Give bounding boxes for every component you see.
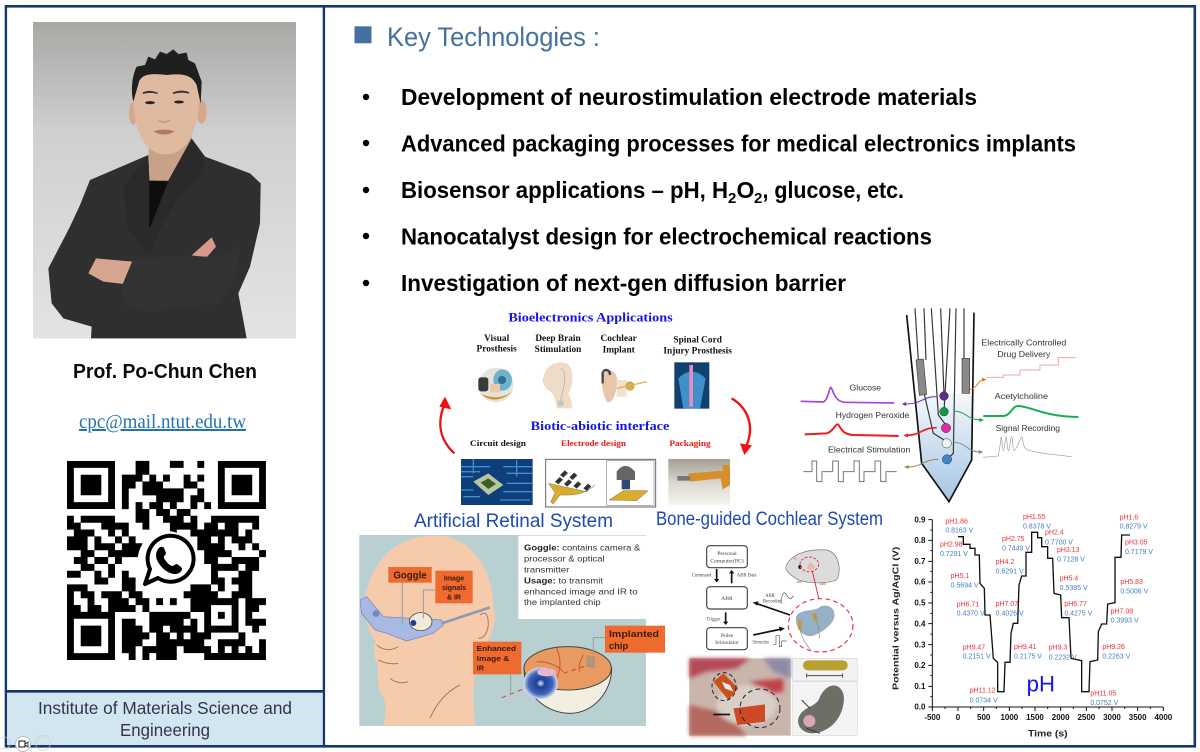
application labels: Stimulation bbox=[535, 345, 582, 355]
chart: potential versus time: Time (s) bbox=[1028, 729, 1068, 739]
pH labels: 0.5385 V bbox=[1060, 585, 1088, 592]
pH labels: 0.0752 V bbox=[1090, 700, 1119, 707]
y tick labels: 0.6 bbox=[914, 578, 926, 587]
pH labels: pH4.2 bbox=[996, 559, 1014, 566]
left forearm bbox=[88, 258, 133, 284]
electrode drawing bbox=[793, 658, 857, 681]
portrait photo bbox=[33, 22, 296, 338]
pH labels: pH11.12 bbox=[970, 688, 996, 695]
pH labels: 0.2263 V bbox=[1102, 653, 1131, 660]
application labels: Spinal Cord bbox=[673, 335, 723, 345]
bullet list: Advanced packaging processes for medical electronics implants bbox=[401, 130, 1076, 156]
implanted eye cross-section bbox=[502, 647, 612, 713]
connector lines bbox=[402, 583, 605, 693]
bullet list: Nanocatalyst design for electrochemical reactions bbox=[401, 224, 932, 250]
pH labels: 0.2151 V bbox=[963, 653, 991, 660]
x tick labels: 3000 bbox=[1103, 713, 1121, 722]
y tick labels: 0.2 bbox=[914, 661, 926, 670]
y tick labels: 0.4 bbox=[914, 619, 926, 628]
lapels bbox=[123, 139, 205, 257]
pH labels: 0.8378 V bbox=[1023, 523, 1051, 530]
y tick labels: 0.3 bbox=[914, 640, 926, 649]
cochlea in dashed circle bbox=[788, 599, 853, 652]
pH labels: pH1.55 bbox=[1023, 514, 1046, 521]
pH labels: pH9.3 bbox=[1049, 645, 1067, 652]
block labels: Trigger bbox=[706, 617, 721, 622]
icon: ear implant bbox=[602, 370, 647, 402]
description text bbox=[524, 544, 641, 607]
application labels bbox=[477, 334, 732, 356]
block labels: Stimulator bbox=[715, 640, 739, 646]
right hand bbox=[192, 237, 216, 257]
probe labels: Electrical Stimulation bbox=[828, 445, 911, 455]
pH labels: 0.4370 V bbox=[957, 611, 985, 618]
jacket bbox=[48, 138, 261, 338]
block labels: ABR bbox=[765, 594, 776, 599]
facial features bbox=[143, 91, 189, 134]
bullet list: 2 bbox=[754, 190, 762, 207]
description text: transmitter bbox=[524, 565, 570, 574]
y tick labels: 0.1 bbox=[914, 682, 926, 691]
x tick labels: 1000 bbox=[1000, 713, 1019, 722]
head bbox=[363, 536, 495, 726]
bullet list bbox=[363, 84, 1076, 296]
bullet list: O bbox=[736, 177, 754, 203]
probe labels: Electrically Controlled bbox=[981, 338, 1067, 348]
block labels: ABR Data bbox=[737, 574, 756, 579]
pH labels: 0.4275 V bbox=[1064, 611, 1093, 618]
application labels: Injury Prosthesis bbox=[663, 346, 732, 356]
orange callouts: Goggle bbox=[393, 570, 427, 581]
description text: Usage: to transmit bbox=[524, 576, 604, 585]
orange callouts: Enhanced bbox=[477, 644, 516, 653]
folded sleeve bbox=[122, 243, 240, 312]
pH labels: 0.2232 V bbox=[1049, 655, 1077, 662]
white description box bbox=[518, 536, 646, 619]
y tick labels: 0.9 bbox=[914, 515, 926, 524]
arrow heads bbox=[902, 378, 987, 469]
probe labels: Glucose bbox=[850, 383, 881, 393]
x tick labels bbox=[924, 713, 1173, 722]
pH labels: pH5.83 bbox=[1120, 579, 1143, 586]
pH labels: pH2.75 bbox=[1002, 536, 1025, 543]
ears bbox=[129, 102, 137, 125]
y tick labels: 0.8 bbox=[914, 536, 926, 545]
pH labels: pH1.6 bbox=[1120, 514, 1138, 521]
orange callouts bbox=[388, 567, 665, 674]
diagram: neural probe bbox=[801, 308, 1078, 502]
pH labels: pH9.41 bbox=[1014, 644, 1037, 651]
diagram: bioelectronics applications bbox=[439, 311, 752, 507]
x tick labels: 2000 bbox=[1052, 713, 1070, 722]
pH labels: 0.7179 V bbox=[1125, 549, 1153, 556]
pH labels: 0.4026 V bbox=[996, 611, 1024, 618]
footer: institute name: Engineering bbox=[120, 720, 210, 740]
probe labels: Acetylcholine bbox=[995, 391, 1048, 401]
block labels: ABR bbox=[721, 596, 733, 602]
block labels: Personal bbox=[717, 551, 737, 557]
description text: Goggle: contains camera & bbox=[524, 544, 641, 553]
pH labels: pH11.05 bbox=[1090, 691, 1116, 698]
block labels: Recording bbox=[763, 600, 783, 605]
pH labels: 0.7128 V bbox=[1057, 557, 1085, 564]
panel: bone-guided cochlear system bbox=[689, 546, 857, 736]
diagram: bioelectronics applications: Electrode design bbox=[561, 438, 626, 448]
signal traces and arrows bbox=[801, 358, 1078, 482]
pH labels: 0.8163 V bbox=[945, 528, 974, 535]
y tick labels: 0.5 bbox=[914, 599, 926, 608]
y tick labels: 0.0 bbox=[914, 703, 926, 712]
orange callouts: Image bbox=[444, 575, 464, 582]
neck bbox=[148, 133, 192, 181]
probe labels: Signal Recording bbox=[996, 423, 1060, 433]
pH labels: 0.8279 V bbox=[1120, 523, 1148, 530]
surgical photo bbox=[689, 658, 791, 736]
arrow: left red curve bbox=[439, 397, 454, 453]
bullet list: Development of neurostimulation electrode materials bbox=[401, 84, 977, 110]
image: electrode design bbox=[546, 459, 656, 507]
block arrows bbox=[717, 569, 793, 647]
pH labels: 0.0734 V bbox=[970, 698, 998, 705]
pH labels: 0.5694 V bbox=[951, 583, 979, 590]
name: Prof. Po-Chun Chen bbox=[73, 361, 257, 383]
icon: spine bbox=[674, 362, 709, 409]
pH labels: pH7.07 bbox=[996, 601, 1018, 608]
y tick labels bbox=[914, 515, 926, 712]
pH labels: 0.6291 V bbox=[996, 569, 1024, 576]
diagram: bioelectronics applications: Bioelectronics Applications bbox=[508, 311, 673, 325]
icon: WhatsApp logo bbox=[138, 531, 196, 589]
pH labels: pH3.13 bbox=[1057, 547, 1080, 554]
large pH label: pH bbox=[1027, 672, 1055, 697]
x tick labels: 0 bbox=[956, 713, 961, 722]
image: circuit chip bbox=[461, 459, 533, 505]
arrow: right red curve bbox=[732, 398, 752, 455]
application labels: Deep Brain bbox=[535, 334, 581, 344]
x tick labels: 4000 bbox=[1154, 713, 1173, 722]
pH labels: pH9.26 bbox=[1102, 644, 1125, 651]
footer: institute name: Institute of Materials Science and bbox=[38, 698, 292, 718]
heading: Key Technologies: Key Technologies : bbox=[387, 22, 600, 52]
bullet list: Biosensor applications – pH, H bbox=[401, 177, 728, 203]
block labels bbox=[692, 551, 783, 646]
orange callouts: Implanted bbox=[609, 629, 659, 639]
guinea pig bbox=[786, 550, 839, 601]
pH labels bbox=[940, 514, 1153, 707]
goggles bbox=[360, 597, 490, 641]
block labels: Command bbox=[692, 574, 712, 579]
pH labels: 0.7700 V bbox=[1045, 539, 1073, 546]
pH labels: 0.2175 V bbox=[1014, 653, 1042, 660]
probe labels: Drug Delivery bbox=[997, 349, 1051, 359]
black shirt bbox=[148, 181, 168, 230]
pH labels: pH6.77 bbox=[1064, 601, 1087, 608]
application labels: Prosthesis bbox=[477, 345, 517, 355]
probe labels bbox=[828, 338, 1067, 455]
pH labels: pH9.47 bbox=[963, 644, 985, 651]
probe body bbox=[907, 308, 974, 502]
diagram: bioelectronics applications: Packaging bbox=[669, 438, 711, 448]
x tick labels: 3500 bbox=[1129, 713, 1147, 722]
block labels: Computer(PC) bbox=[710, 557, 744, 564]
cochlea render bbox=[793, 682, 857, 736]
heading: Bone-guided Cochlear System: Bone-guided Cochlear System bbox=[656, 509, 883, 530]
bullet list: , glucose, etc. bbox=[762, 177, 904, 203]
application labels: Visual bbox=[484, 334, 510, 344]
orange callouts: & IR bbox=[447, 595, 461, 602]
pH labels: pH1.86 bbox=[945, 518, 968, 525]
axes bbox=[928, 520, 1163, 711]
image: packaging bbox=[668, 459, 730, 505]
x tick labels: 2500 bbox=[1077, 713, 1096, 722]
x tick labels: -500 bbox=[924, 713, 941, 722]
orange callouts: chip bbox=[609, 641, 628, 651]
pH labels: 0.7291 V bbox=[940, 551, 968, 558]
icon: head with stimulator bbox=[542, 362, 572, 408]
email: cpc@mail.ntut.edu.tw bbox=[79, 411, 247, 433]
panel: artificial retinal system bbox=[359, 535, 665, 726]
probe labels: Hydrogen Peroxide bbox=[836, 410, 910, 420]
description text: enhanced image and IR to bbox=[524, 587, 638, 596]
x tick labels: 500 bbox=[977, 713, 991, 722]
axis titles: Potential versus Ag/AgCl (V) bbox=[891, 546, 901, 690]
description text: processor & optical bbox=[524, 555, 605, 564]
footer: institute name bbox=[7, 693, 323, 745]
electrode dots bbox=[940, 392, 952, 464]
pH labels: pH5.1 bbox=[951, 573, 969, 580]
pH labels: pH6.71 bbox=[957, 601, 979, 608]
heading: Artificial Retinal System: Artificial Retinal System bbox=[414, 511, 613, 532]
orange callouts: IR bbox=[477, 663, 485, 672]
diagram: bioelectronics applications: Circuit design bbox=[470, 438, 526, 448]
pH labels: 0.7449 V bbox=[1002, 545, 1030, 552]
bullet list: Investigation of next-gen diffusion barrier bbox=[401, 270, 846, 296]
pH labels: pH2.4 bbox=[1045, 530, 1064, 537]
icon: eye bbox=[478, 368, 513, 402]
diagram: bioelectronics applications: Biotic-abiotic interface bbox=[531, 419, 670, 433]
description text: the implanted chip bbox=[524, 598, 601, 607]
application labels: Implant bbox=[603, 345, 636, 355]
block labels: Pulse bbox=[721, 633, 734, 639]
pH labels: 0.3993 V bbox=[1111, 618, 1139, 625]
application labels: Cochlear bbox=[601, 334, 637, 344]
block labels: Stimulus bbox=[752, 641, 769, 646]
potential curve bbox=[958, 532, 1130, 692]
face bbox=[133, 72, 200, 154]
y tick labels: 0.7 bbox=[914, 557, 926, 566]
orange callouts: signals bbox=[442, 585, 466, 592]
pH labels: 0.5006 V bbox=[1120, 589, 1149, 596]
QR code bbox=[67, 461, 266, 660]
hair bbox=[132, 49, 202, 104]
icon: video recording control bbox=[0, 736, 50, 752]
pH labels: pH7.08 bbox=[1111, 608, 1133, 615]
block diagram bbox=[707, 546, 747, 650]
pH labels: pH5.4 bbox=[1060, 575, 1078, 582]
orange callouts: Image & bbox=[477, 654, 510, 663]
pH labels: pH3.05 bbox=[1125, 540, 1148, 547]
bullet list: 2 bbox=[728, 190, 736, 207]
pH labels: pH2.98 bbox=[940, 542, 963, 549]
chart: potential versus time bbox=[891, 514, 1173, 739]
x tick labels: 1500 bbox=[1026, 713, 1044, 722]
